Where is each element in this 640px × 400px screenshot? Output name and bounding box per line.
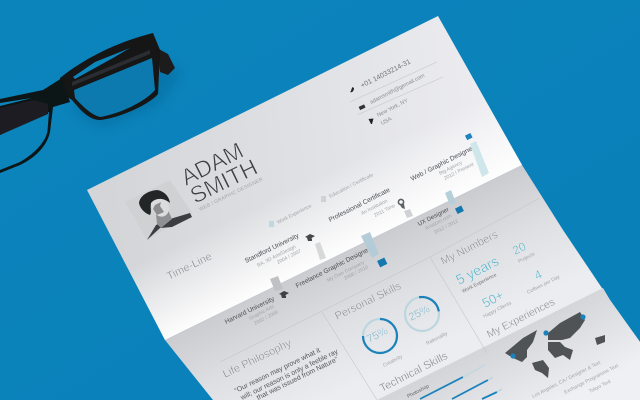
- neck and collar: [156, 210, 172, 228]
- last name: SMITH: [186, 154, 262, 208]
- right lens lower window: [74, 58, 155, 117]
- timeline: Harvard: Harvard University: [224, 295, 276, 326]
- panel: my experiences: Tokyo Text: [588, 378, 612, 395]
- timeline: Stanford: [244, 232, 326, 269]
- left temple arm: [0, 100, 48, 135]
- icon: pin: [368, 118, 374, 124]
- panel: my numbers: [439, 228, 561, 320]
- timeline: UX Designer: UX Designer: [417, 207, 450, 228]
- left lens frame: [0, 78, 70, 173]
- heading: Time-Line: Time-Line: [165, 251, 214, 283]
- photo background: [125, 180, 192, 240]
- lower right panel: experiences: [377, 288, 640, 400]
- timeline: Web Designer: Big Agency: [438, 160, 464, 177]
- shoulders and shirt: [147, 213, 192, 240]
- phone number: +01 14033214-31: [360, 58, 412, 90]
- bridge highlight: [59, 81, 65, 94]
- panel: my numbers: Happy Clients: [482, 300, 513, 320]
- legend: education: Education / Certificate: [328, 172, 375, 200]
- panel: life philosophy: “Our reason may prove what it: [234, 347, 322, 395]
- panel: technical skills: Photoshop: [406, 383, 430, 400]
- icon: briefcase: [455, 206, 464, 214]
- top panel: header and upper timeline: [87, 16, 522, 340]
- icon: graduation cap: [279, 291, 289, 298]
- icon: phone: [350, 87, 354, 92]
- face: [148, 192, 172, 220]
- panel: my numbers: 50+: [480, 287, 506, 311]
- temple tip: [157, 48, 175, 75]
- panel: my experiences: Exchange Programme Text: [563, 363, 620, 396]
- right temple arm sheen: [72, 50, 150, 86]
- timeline: Freelance: My Own Company: [326, 260, 366, 284]
- timeline: Certificate: An Institution: [360, 198, 389, 217]
- legend: work experience: Work Experience: [276, 203, 313, 226]
- middle panel: skills and numbers: [165, 165, 640, 400]
- hair: [139, 190, 170, 215]
- glasses shadow: [70, 60, 182, 128]
- panel: life philosophy: [221, 337, 340, 400]
- timeline: Freelance: 2008 / 2010: [343, 264, 370, 282]
- photo: [125, 180, 192, 240]
- panel: my numbers: 20: [510, 239, 529, 258]
- panel: my numbers: My Numbers: [439, 228, 500, 268]
- panel: my numbers: 4: [532, 267, 545, 283]
- timeline legend: [269, 172, 375, 227]
- chart: 25% ring: 25%: [407, 303, 432, 324]
- name: [176, 137, 262, 208]
- panel: personal skills: [333, 280, 449, 369]
- timeline: Harvard: 2002 / 2006: [253, 309, 280, 327]
- panel: my numbers: Projects: [517, 251, 536, 265]
- chart: 75% ring: 75%: [365, 325, 390, 346]
- light band above fold: [87, 16, 522, 340]
- panel: technical skills: Technical Skills: [378, 350, 450, 395]
- timeline: Stanford: 2004 / 2007: [276, 248, 303, 266]
- timeline: Harvard: Graphic Arts: [248, 304, 276, 322]
- panel: personal skills: Personal Skills: [333, 280, 404, 323]
- timeline: Certificate: Professional Certificate: [328, 187, 392, 224]
- timeline: Harvard: [224, 276, 289, 327]
- icon: medal: [398, 199, 405, 209]
- timeline: Web Designer: [410, 133, 489, 183]
- map pins: [510, 314, 586, 359]
- panel: personal skills: Rationality: [425, 331, 449, 347]
- timeline: UX Designer: 2012 / 2012: [433, 218, 460, 236]
- timeline: UX Designer: Amazon.com: [424, 213, 453, 232]
- first name: ADAM: [176, 137, 247, 190]
- icon: briefcase: [377, 258, 387, 267]
- timeline: Web Designer: Web / Graphic Designer: [410, 144, 476, 183]
- world map: [505, 312, 605, 378]
- face shadow: [153, 202, 164, 215]
- divider lines: [220, 62, 540, 400]
- right lens frame: [60, 33, 160, 120]
- panel: technical skills: [378, 350, 502, 400]
- panel: personal skills: Creativity: [382, 354, 404, 369]
- address: New York, NY: [376, 98, 409, 119]
- panel: my experiences: My Experiences: [485, 296, 557, 341]
- job title: WEB / GRAPHIC DESIGNER: [198, 177, 264, 213]
- timeline: Freelance: Freelance Graphic Designer: [295, 246, 372, 290]
- country: USA: [380, 116, 393, 127]
- icon: envelope: [359, 104, 366, 110]
- email: adamsmith@gemail.com: [369, 73, 426, 106]
- left lens upper window: [0, 98, 32, 106]
- panel: my numbers: 5 years: [453, 253, 501, 288]
- right lens upper window: [73, 48, 130, 79]
- timeline: UX Designer: [417, 190, 464, 236]
- timeline: Stanford: Standford University: [244, 232, 301, 265]
- icon: graduation cap: [305, 234, 315, 241]
- panel: life philosophy: Life Philosophy: [221, 337, 294, 381]
- icon: briefcase: [465, 133, 473, 140]
- panel: my numbers: Coffees per Day: [526, 274, 561, 296]
- timeline: Stanford: BA, 3D Arts/Design: [256, 244, 297, 269]
- bar chart: [420, 365, 502, 399]
- panel: my experiences: [485, 296, 620, 400]
- timeline: Freelance: [295, 232, 387, 290]
- panel: my numbers: Work Experience: [461, 272, 498, 295]
- contact details: [350, 58, 426, 127]
- glasses: [0, 33, 182, 173]
- swatch: work: [269, 221, 274, 227]
- timeline: Web Designer: 2012 / Present: [443, 161, 475, 182]
- panel: my experiences: Los Angeles, CA / Designer & Text: [531, 360, 602, 400]
- timeline: Certificate: 2011 Time: [373, 203, 397, 219]
- swatch: education: [321, 196, 326, 202]
